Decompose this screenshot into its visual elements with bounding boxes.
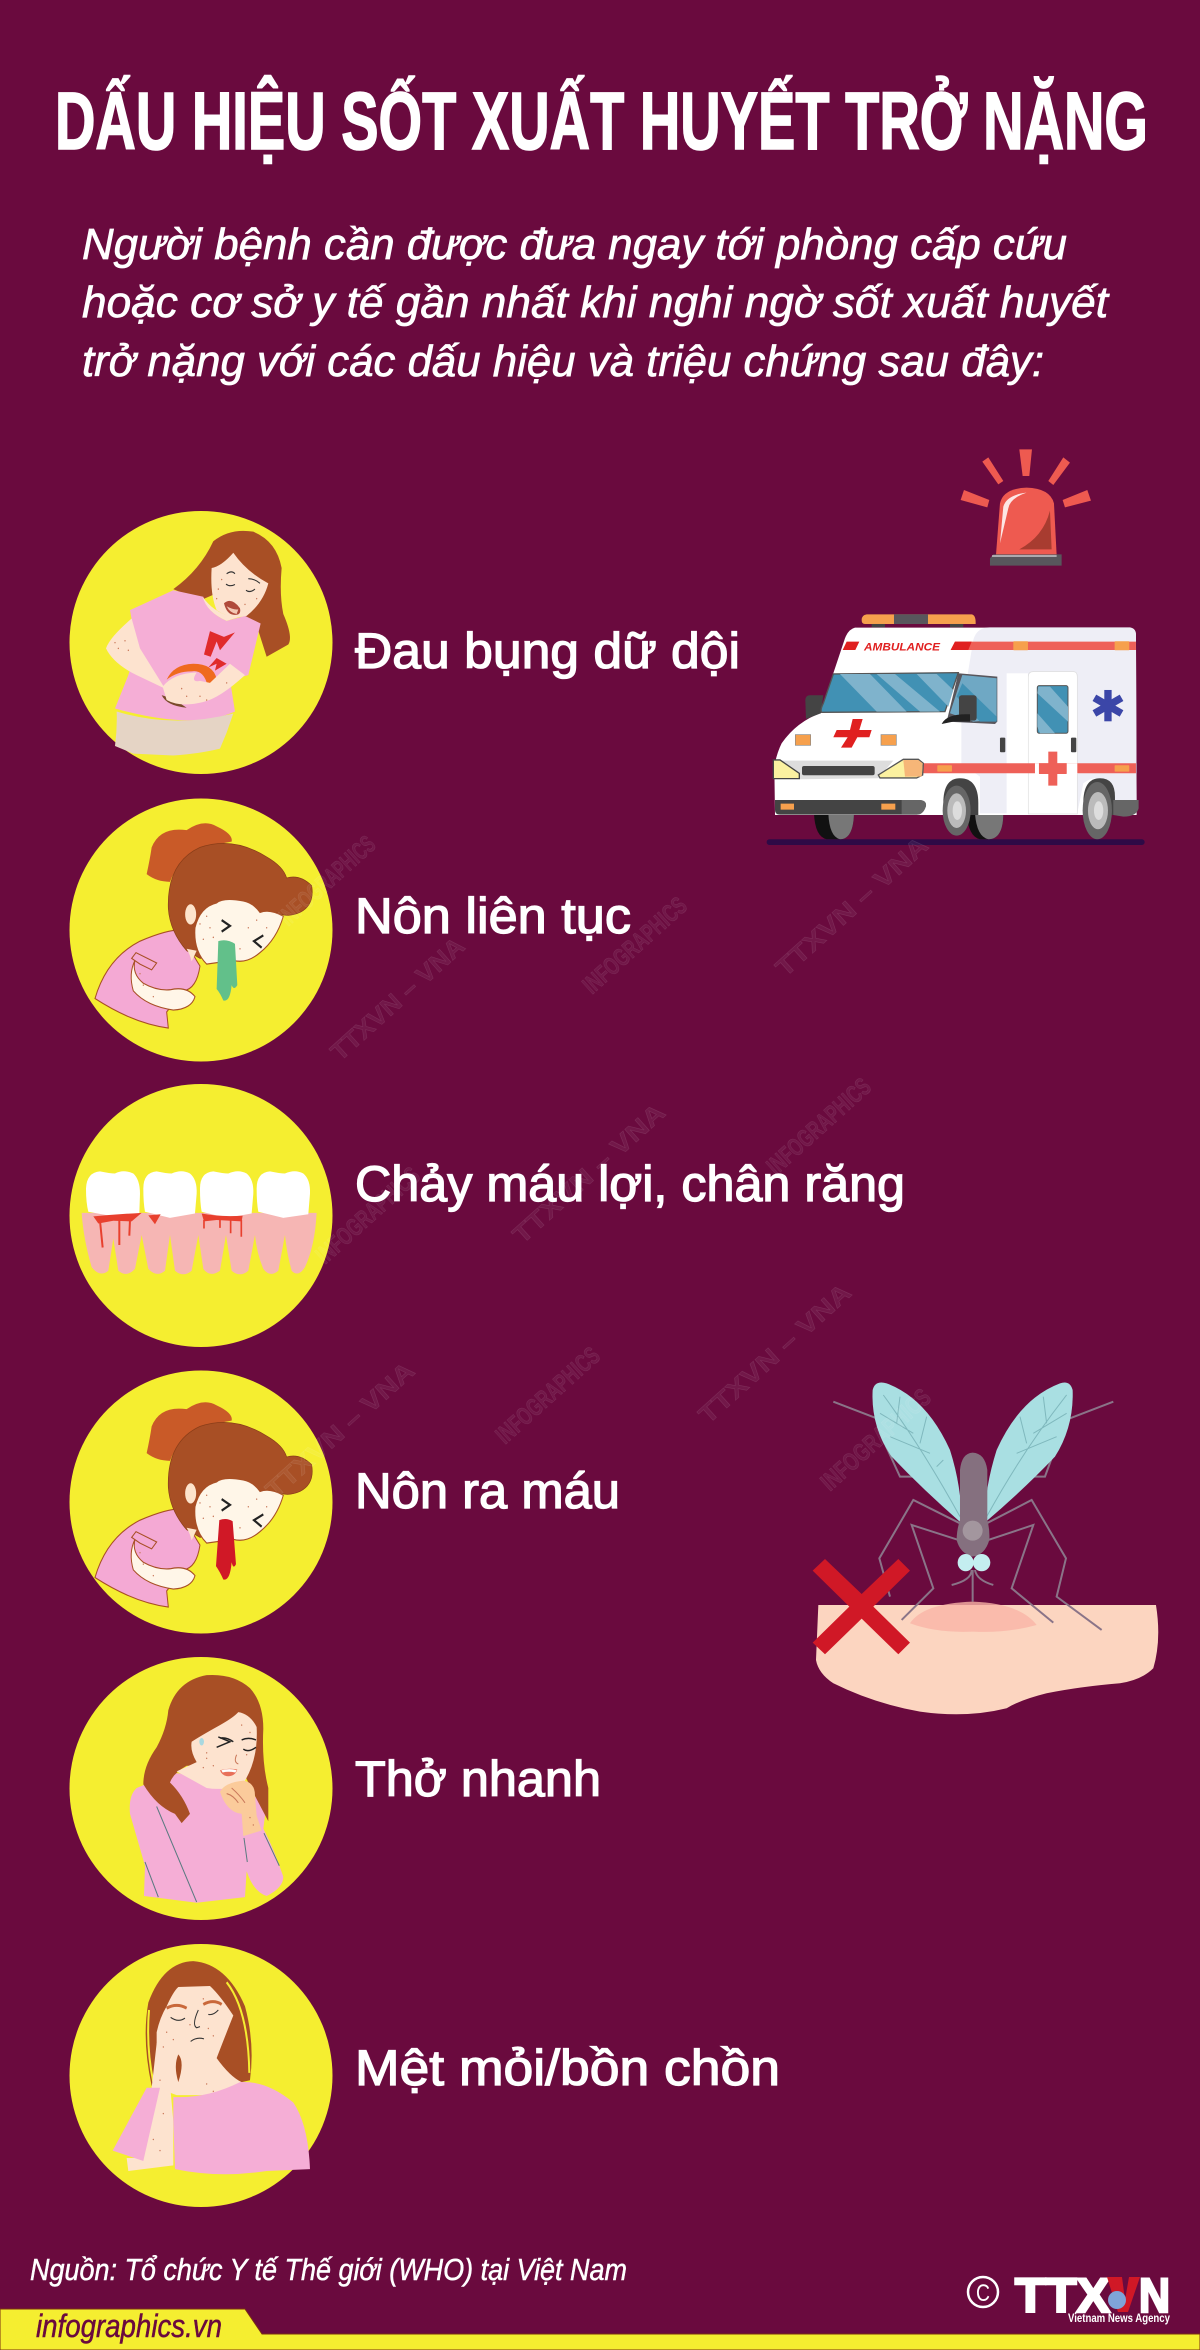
icon: woman holding stomach (106, 531, 290, 756)
logo: TTXVN (968, 2270, 1170, 2325)
source: Nguồn: Tổ chức Y tế Thế giới (WHO) tại Việt Nam (30, 2252, 627, 2287)
footer website: infographics.vn (36, 2308, 222, 2344)
footer yellow banner (0, 2309, 1200, 2350)
copyright mark (968, 2277, 998, 2307)
symptom 2: persistent vomiting (70, 798, 631, 1062)
label 1: Đau bụng dữ dội (355, 623, 740, 679)
icon: mosquito biting skin with red cross (813, 1382, 1158, 1714)
intro text (82, 220, 1110, 386)
watermarks: TTXVN – VNA (507, 1098, 671, 1249)
symptom 3: bleeding gums (70, 1084, 905, 1347)
icon: woman coughing (130, 1675, 283, 1903)
icon: bleeding teeth and gums (82, 1171, 317, 1274)
watermarks: INFOGRAPHICS (815, 1383, 937, 1496)
skin (816, 1605, 1158, 1714)
icon: ambulance: AMBULANCE (863, 641, 941, 653)
watermarks: INFOGRAPHICS (310, 1162, 426, 1269)
icon: ambulance (767, 614, 1145, 845)
label 6: Mệt mỏi/bồn chồn (355, 2040, 780, 2096)
watermarks: TTXVN – VNA (693, 1278, 857, 1429)
logo letters TTX: TTX (1015, 2270, 1110, 2323)
mosquito legs (833, 1402, 1113, 1630)
symptom 6: fatigue and restlessness (70, 1944, 780, 2207)
globe (1108, 2291, 1126, 2309)
eyes (958, 1554, 974, 1571)
label 5: Thở nhanh (355, 1751, 601, 1807)
symptom 4: vomiting blood (70, 1370, 620, 1634)
symptom 5: rapid breathing (70, 1657, 601, 1920)
watermarks: INFOGRAPHICS (761, 1073, 877, 1180)
yellow circle 3 (70, 1084, 332, 1347)
watermarks: TTXVN – VNA (325, 932, 470, 1066)
intro text: Người bệnh cần được đưa ngay tới phòng cấp cứu (82, 220, 1067, 269)
agency name: Vietnam News Agency (1068, 2311, 1170, 2325)
icon: red siren (961, 449, 1091, 566)
left wing (872, 1382, 962, 1523)
yellow circle 2 (70, 798, 332, 1062)
label 4: Nôn ra máu (355, 1463, 620, 1519)
label 3: Chảy máu lợi, chân răng (355, 1156, 905, 1212)
body (957, 1453, 989, 1557)
wing veins (880, 1395, 1067, 1517)
yellow circle 5 (70, 1657, 332, 1920)
yellow circle 4 (70, 1370, 332, 1634)
watermarks (260, 830, 937, 1504)
yellow circle 1 (70, 511, 332, 774)
icon: girl vomiting green (95, 823, 312, 1028)
icon: girl vomiting blood (95, 1402, 312, 1607)
icon: tired woman resting face on hand (113, 1961, 310, 2174)
yellow circle 6 (70, 1944, 332, 2207)
symptom 1: severe abdominal pain (70, 511, 740, 774)
intro text: trở nặng với các dấu hiệu và triệu chứng sau đây: (82, 337, 1044, 386)
copyright mark: C (976, 2280, 990, 2307)
watermarks: TTXVN – VNA (260, 1357, 420, 1504)
watermarks: INFOGRAPHICS (273, 830, 381, 931)
bite mark (910, 1602, 1037, 1632)
red V accent (1107, 2277, 1140, 2312)
watermarks: INFOGRAPHICS (577, 892, 693, 999)
label 2: Nôn liên tục (355, 888, 631, 944)
red cross mark (813, 1559, 910, 1654)
watermarks: TTXVN – VNA (770, 831, 934, 982)
right wing (984, 1382, 1073, 1523)
watermarks: INFOGRAPHICS (490, 1342, 606, 1449)
intro text: hoặc cơ sở y tế gần nhất khi nghi ngờ sốt xuất huyết (82, 278, 1110, 327)
logo letter N: N (1139, 2270, 1170, 2323)
